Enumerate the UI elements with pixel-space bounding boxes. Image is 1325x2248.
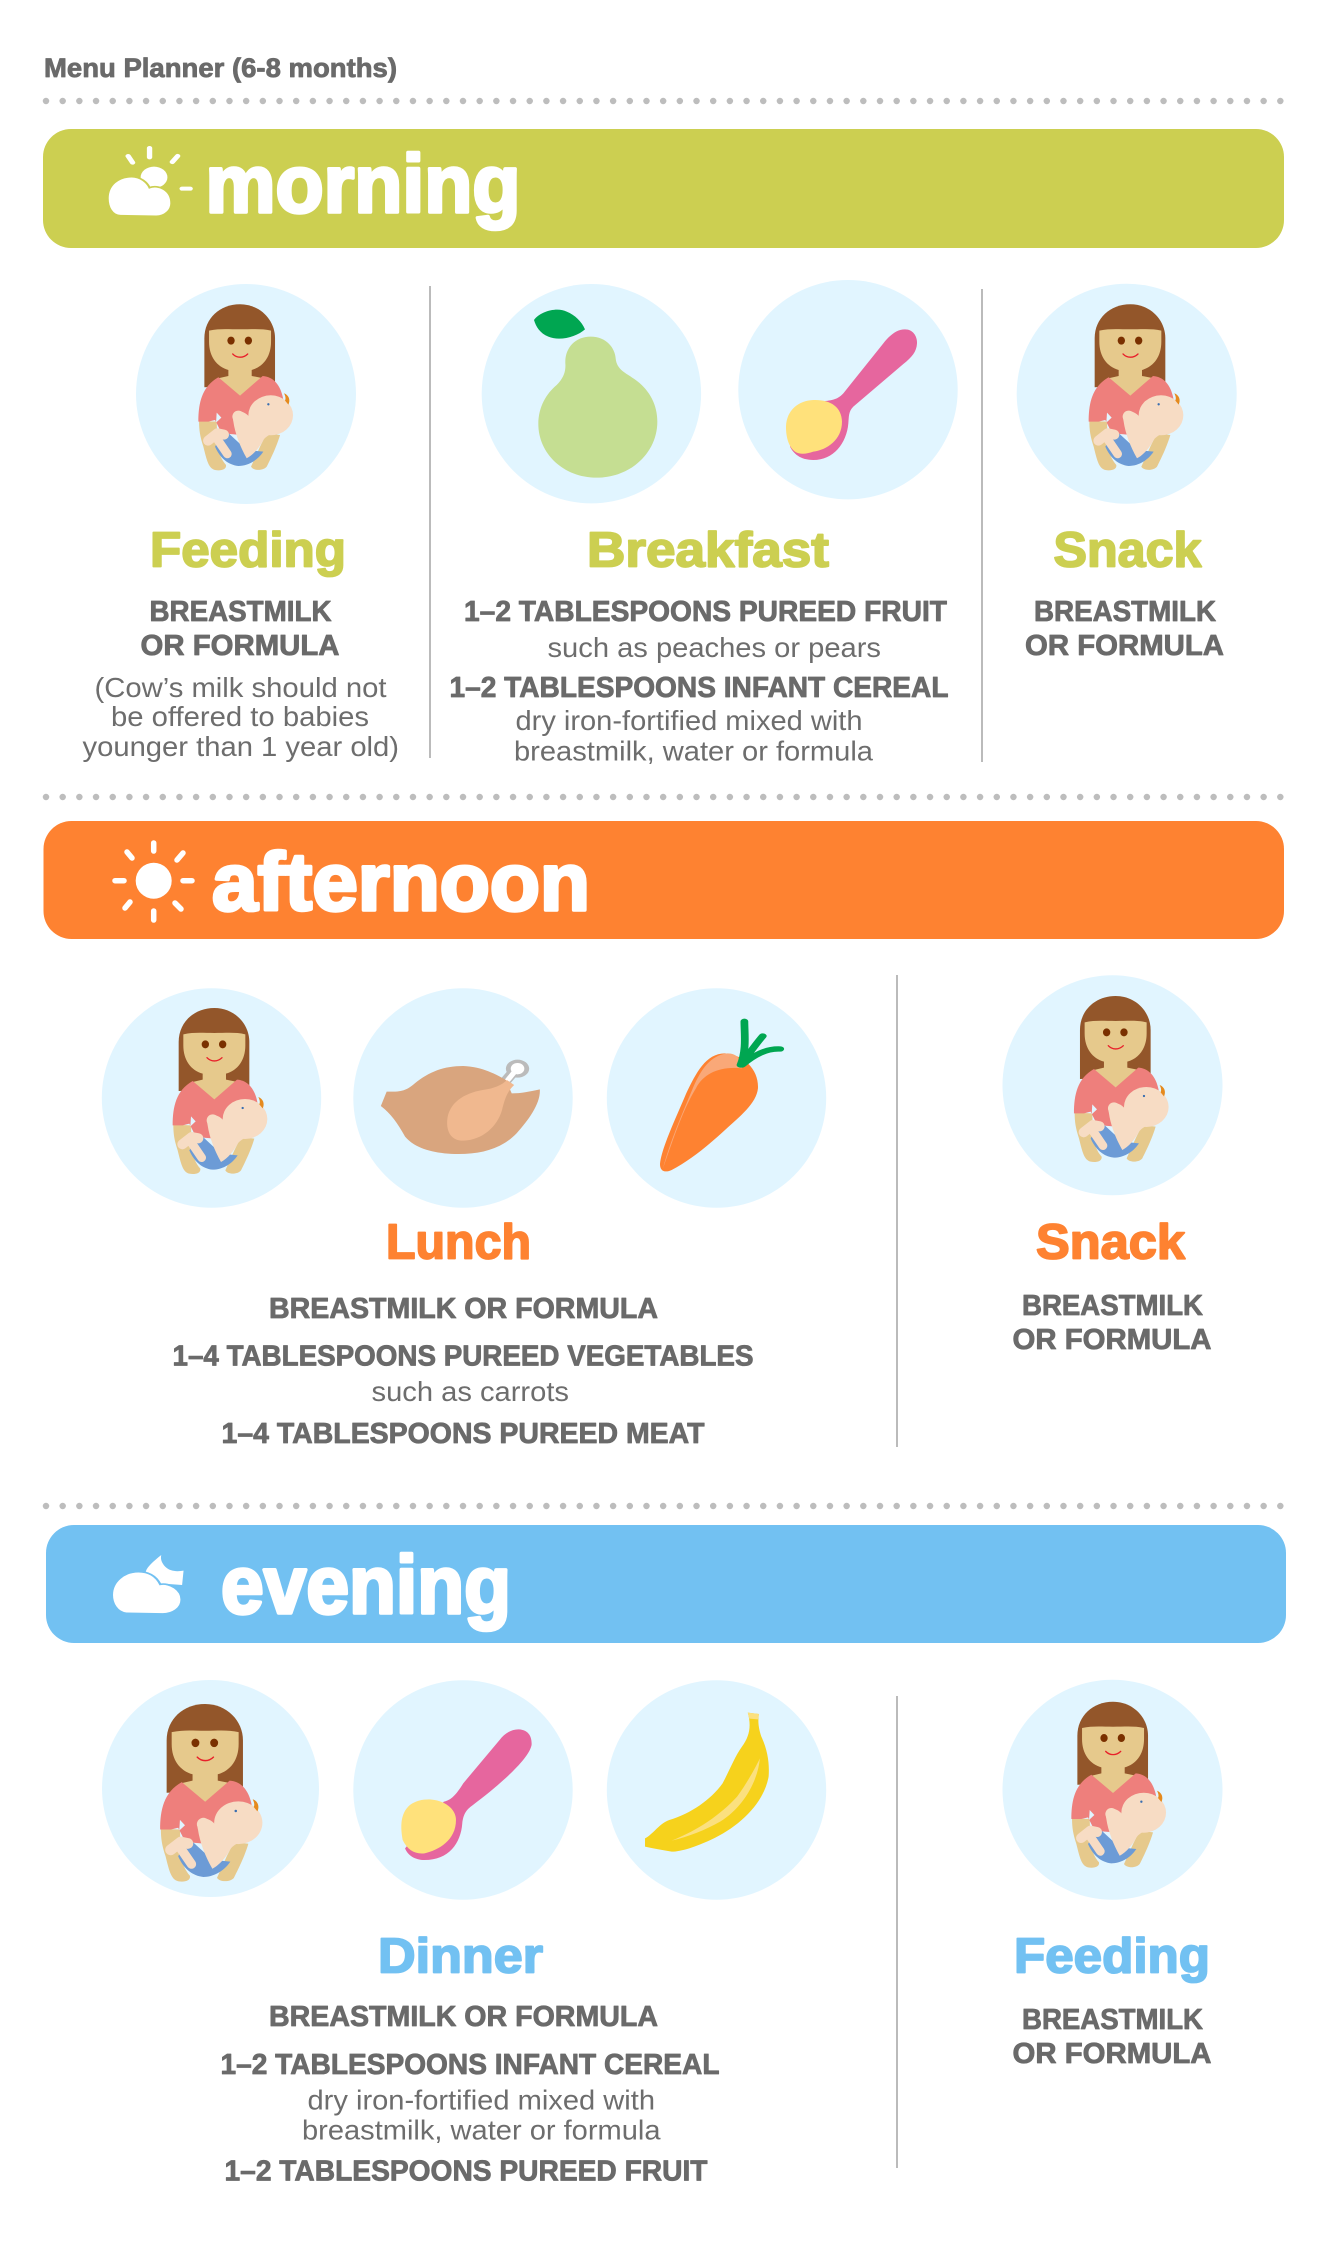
heading: breakfast: Breakfast: [587, 524, 829, 578]
column: lunch: [102, 988, 826, 1450]
lunch text: 1–4 TABLESPOONS PUREED MEAT: [222, 1418, 705, 1450]
column: morning snack: [1017, 284, 1237, 662]
breakfast text: 1–2 TABLESPOONS PUREED FRUIT: [464, 596, 948, 628]
heading: dinner: Dinner: [378, 1930, 543, 1984]
icon: mother feeding baby: [1002, 975, 1222, 1195]
icon: mother feeding baby: [1002, 1680, 1222, 1900]
feeding text: be offered to babies: [111, 701, 369, 732]
snack text: [1025, 596, 1224, 662]
icon: mother feeding baby: [102, 1680, 319, 1897]
panel: afternoon: [44, 821, 1284, 1450]
afternoon heading: afternoon: [212, 837, 590, 928]
icon: pear: [482, 284, 701, 503]
heading: feeding: Feeding: [150, 524, 346, 578]
lunch text: [172, 1293, 754, 1450]
lunch text: BREASTMILK OR FORMULA: [269, 1293, 658, 1325]
feeding text: [82, 596, 399, 762]
breakfast text: dry iron-fortified mixed with: [516, 705, 862, 736]
snack text: [1012, 1290, 1212, 1356]
breakfast text: breastmilk, water or formula: [514, 736, 873, 766]
feeding text: [1012, 2004, 1212, 2070]
snack text: BREASTMILK: [1034, 596, 1216, 628]
icon: carrot: [607, 988, 826, 1208]
heading: feeding: Feeding: [1014, 1930, 1210, 1984]
icon: banana: [607, 1680, 826, 1900]
feeding text: younger than 1 year old): [82, 731, 399, 762]
panel: morning: [43, 129, 1284, 766]
breakfast text: such as peaches or pears: [548, 632, 881, 663]
afternoon banner: [44, 821, 1284, 939]
dinner text: BREASTMILK OR FORMULA: [269, 2001, 658, 2033]
dinner text: 1–2 TABLESPOONS INFANT CEREAL: [220, 2049, 720, 2081]
snack text: OR FORMULA: [1025, 630, 1224, 662]
title: Menu Planner (6-8 months): [44, 53, 397, 83]
column: feeding: [82, 284, 399, 762]
column: afternoon snack: [1002, 975, 1222, 1356]
panel: evening: [46, 1525, 1286, 2188]
dinner text: [220, 2001, 720, 2188]
icon: mother feeding baby: [136, 284, 356, 504]
feeding text: BREASTMILK: [1022, 2004, 1203, 2036]
column: evening feeding: [1002, 1680, 1222, 2070]
morning heading: morning: [206, 139, 520, 230]
evening heading: evening: [221, 1540, 511, 1631]
icon: sun: [115, 843, 192, 920]
snack text: OR FORMULA: [1012, 1324, 1212, 1356]
icon: mother feeding baby: [102, 988, 321, 1208]
icon: spoon with cereal: [353, 1680, 573, 1900]
breakfast text: 1–2 TABLESPOONS INFANT CEREAL: [450, 672, 948, 704]
icon: roast chicken: [353, 988, 573, 1208]
morning banner: [43, 129, 1284, 248]
feeding text: OR FORMULA: [140, 630, 340, 662]
feeding text: BREASTMILK: [150, 596, 332, 628]
breakfast text: [450, 596, 948, 766]
lunch text: such as carrots: [372, 1376, 569, 1407]
feeding text: (Cow’s milk should not: [94, 672, 387, 703]
icon: mother feeding baby: [1017, 284, 1237, 504]
dinner text: 1–2 TABLESPOONS PUREED FRUIT: [224, 2156, 708, 2188]
feeding text: OR FORMULA: [1012, 2038, 1212, 2070]
column: breakfast: [450, 280, 958, 766]
heading: snack: Snack: [1054, 524, 1202, 578]
icon: moon behind cloud: [112, 1555, 184, 1614]
snack text: BREASTMILK: [1022, 1290, 1203, 1322]
column: dinner: [102, 1680, 826, 2188]
heading: snack: Snack: [1036, 1216, 1186, 1270]
icon: spoon with cereal: [738, 280, 958, 499]
evening banner: [46, 1525, 1286, 1643]
dinner text: breastmilk, water or formula: [302, 2114, 661, 2146]
dinner text: dry iron-fortified mixed with: [308, 2084, 655, 2116]
icon: sun behind cloud: [108, 148, 190, 216]
lunch text: 1–4 TABLESPOONS PUREED VEGETABLES: [172, 1340, 754, 1372]
heading: lunch: Lunch: [386, 1216, 531, 1270]
